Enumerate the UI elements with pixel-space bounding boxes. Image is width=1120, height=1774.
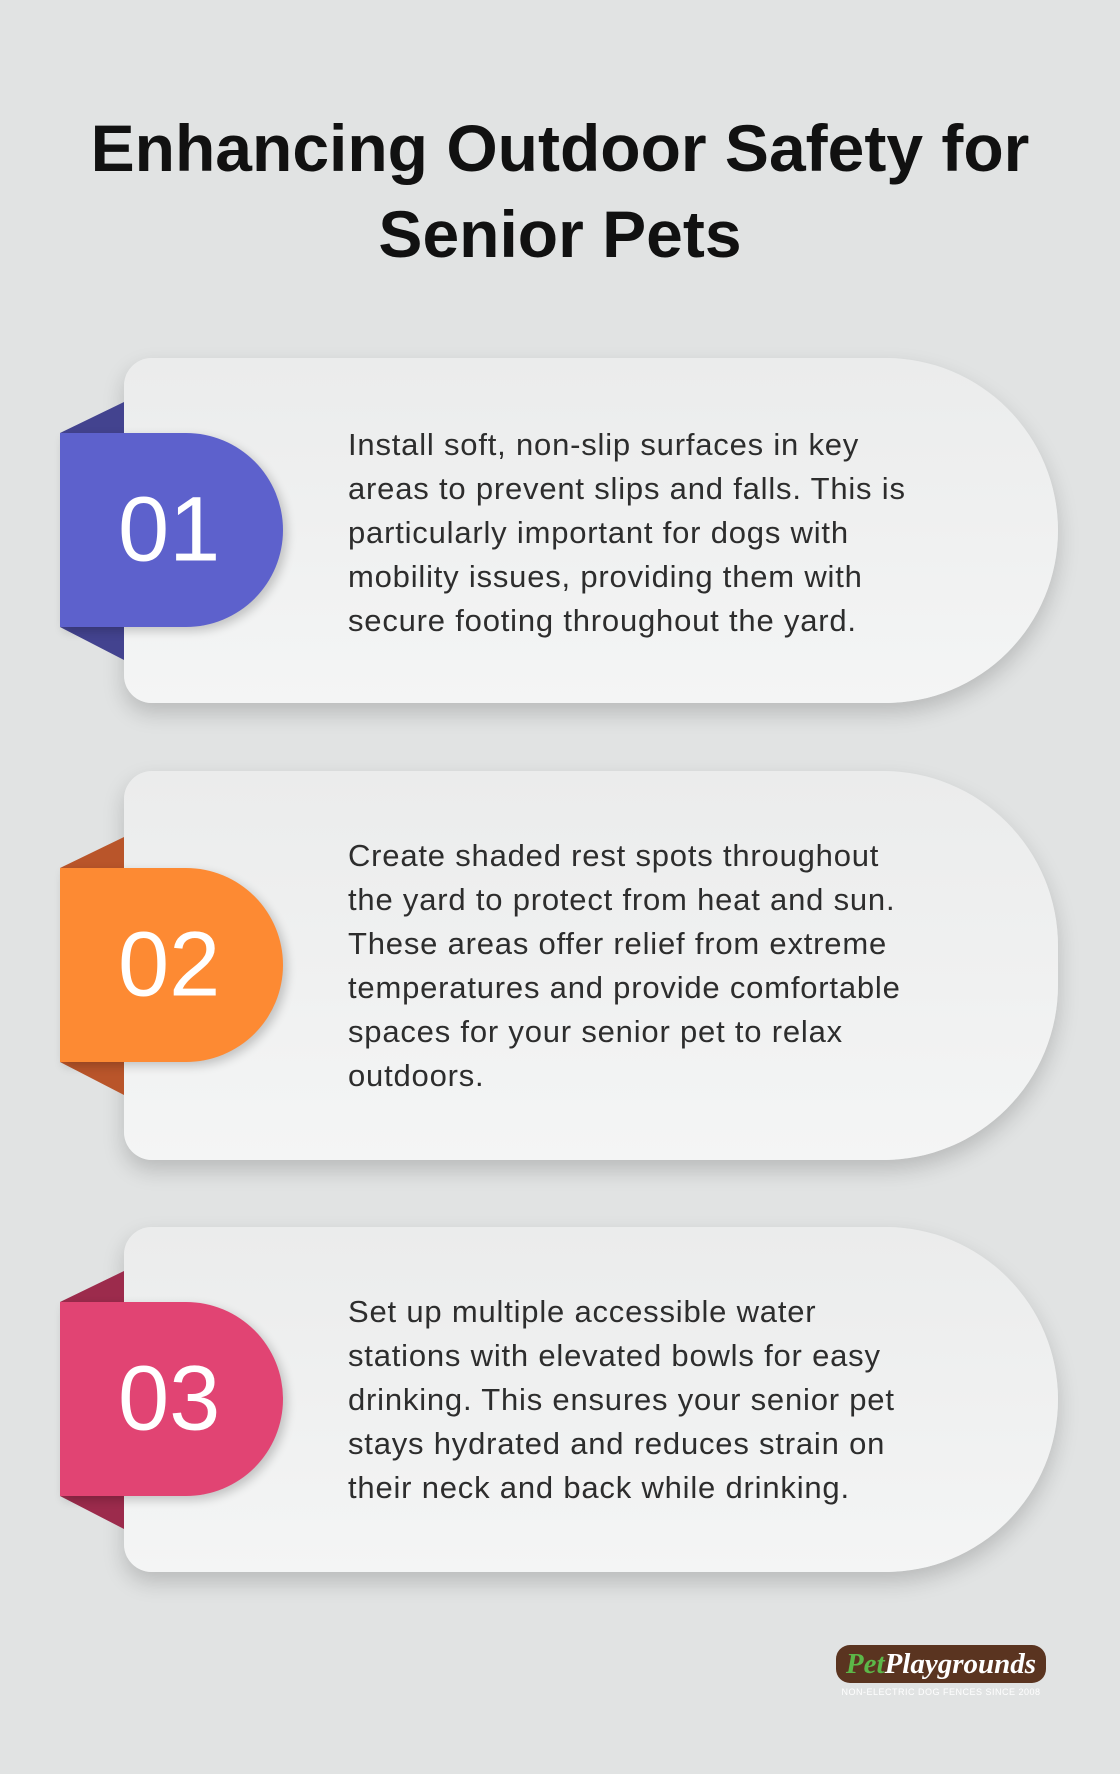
number badge 03 [60, 1302, 283, 1496]
card 2 [124, 771, 1058, 1160]
text 2: temperatures and provide comfortable [348, 970, 901, 1005]
text 2: These areas offer relief from extreme [348, 926, 887, 961]
tab fold 1 [60, 402, 124, 660]
logo: NON-ELECTRIC DOG FENCES SINCE 2008 [841, 1687, 1041, 1697]
tab fold 2 [60, 837, 124, 1095]
panel: step 1 [60, 358, 1066, 722]
text 2: the yard to protect from heat and sun. [348, 882, 895, 917]
number badge 02 [60, 868, 283, 1062]
text 2: outdoors. [348, 1058, 484, 1093]
text 1: secure footing throughout the yard. [348, 603, 857, 638]
text 2: spaces for your senior pet to relax [348, 1014, 843, 1049]
logo: PetPlaygrounds [846, 1648, 1036, 1680]
title [91, 111, 1029, 271]
panel: step 2 [60, 771, 1066, 1178]
tab fold 3 [60, 1271, 124, 1529]
text 1: particularly important for dogs with [348, 515, 849, 550]
text 1: mobility issues, providing them with [348, 559, 863, 594]
card 3 [124, 1227, 1058, 1572]
text 3: Set up multiple accessible water [348, 1294, 816, 1329]
text 2: Create shaded rest spots throughout [348, 838, 879, 873]
number badge 03: 03 [118, 1348, 220, 1450]
panel: step 3 [60, 1227, 1066, 1590]
number badge 02: 02 [118, 914, 220, 1016]
text 1 [348, 427, 906, 638]
title: Senior Pets [378, 197, 742, 271]
text 3: drinking. This ensures your senior pet [348, 1382, 895, 1417]
text 3: stations with elevated bowls for easy [348, 1338, 881, 1373]
logo [836, 1645, 1046, 1697]
text 2 [348, 838, 901, 1093]
text 1: Install soft, non-slip surfaces in key [348, 427, 859, 462]
title: Enhancing Outdoor Safety for [91, 111, 1029, 185]
card 1 [124, 358, 1058, 703]
number badge 01: 01 [118, 478, 220, 580]
text 3: stays hydrated and reduces strain on [348, 1426, 885, 1461]
text 1: areas to prevent slips and falls. This is [348, 471, 906, 506]
number badge 01 [60, 433, 283, 627]
text 3: their neck and back while drinking. [348, 1470, 850, 1505]
text 3 [348, 1294, 895, 1505]
